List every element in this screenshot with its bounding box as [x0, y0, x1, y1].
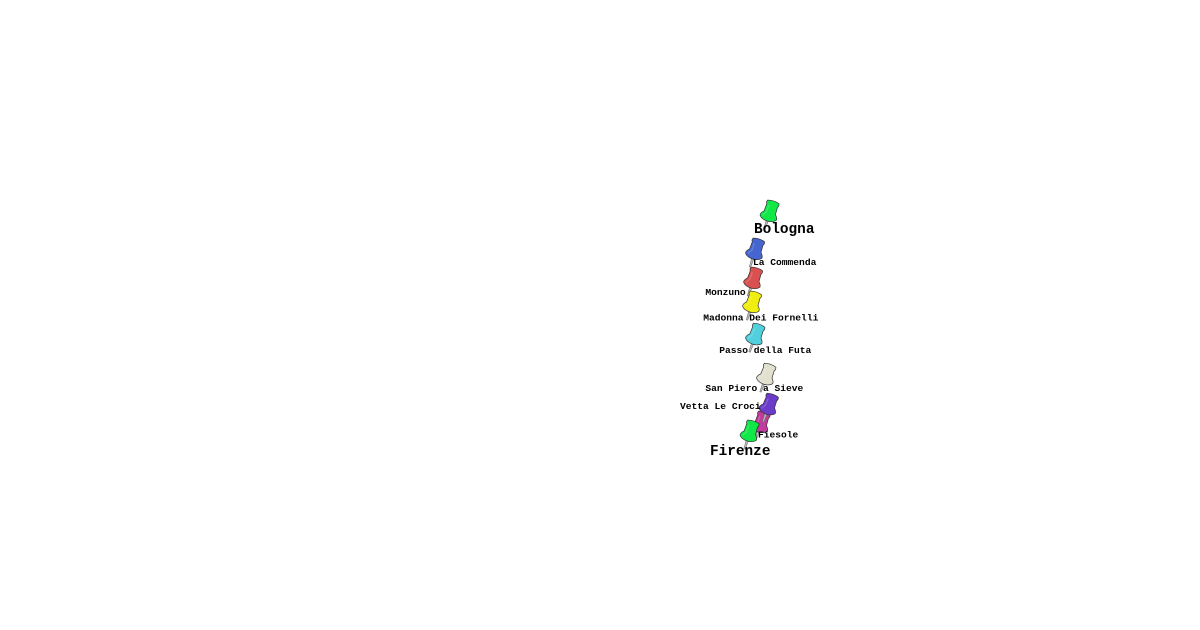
label: La Commenda: La Commenda	[753, 257, 817, 268]
pin: La Commenda	[742, 236, 767, 270]
pin: Bologna	[756, 198, 782, 232]
label: Bologna: Bologna	[754, 222, 815, 238]
pin: Passo della Futa	[741, 321, 768, 355]
label: Fiesole: Fiesole	[758, 430, 799, 440]
pin: Monzuno	[740, 265, 765, 299]
label: Firenze: Firenze	[710, 444, 770, 460]
pin: Firenze	[736, 418, 762, 452]
pin: San Piero a Sieve	[752, 361, 779, 395]
pin: Fiesole	[747, 409, 773, 443]
label: Madonna Dei Fornelli: Madonna Dei Fornelli	[703, 312, 819, 324]
pin: Madonna Dei Fornelli	[739, 289, 764, 323]
label: San Piero a Sieve: San Piero a Sieve	[705, 383, 804, 394]
pin: Vetta Le Croci	[755, 391, 781, 425]
label: Monzuno: Monzuno	[705, 287, 746, 298]
label: Vetta Le Croci: Vetta Le Croci	[680, 401, 761, 412]
label: Passo della Futa: Passo della Futa	[719, 345, 812, 356]
